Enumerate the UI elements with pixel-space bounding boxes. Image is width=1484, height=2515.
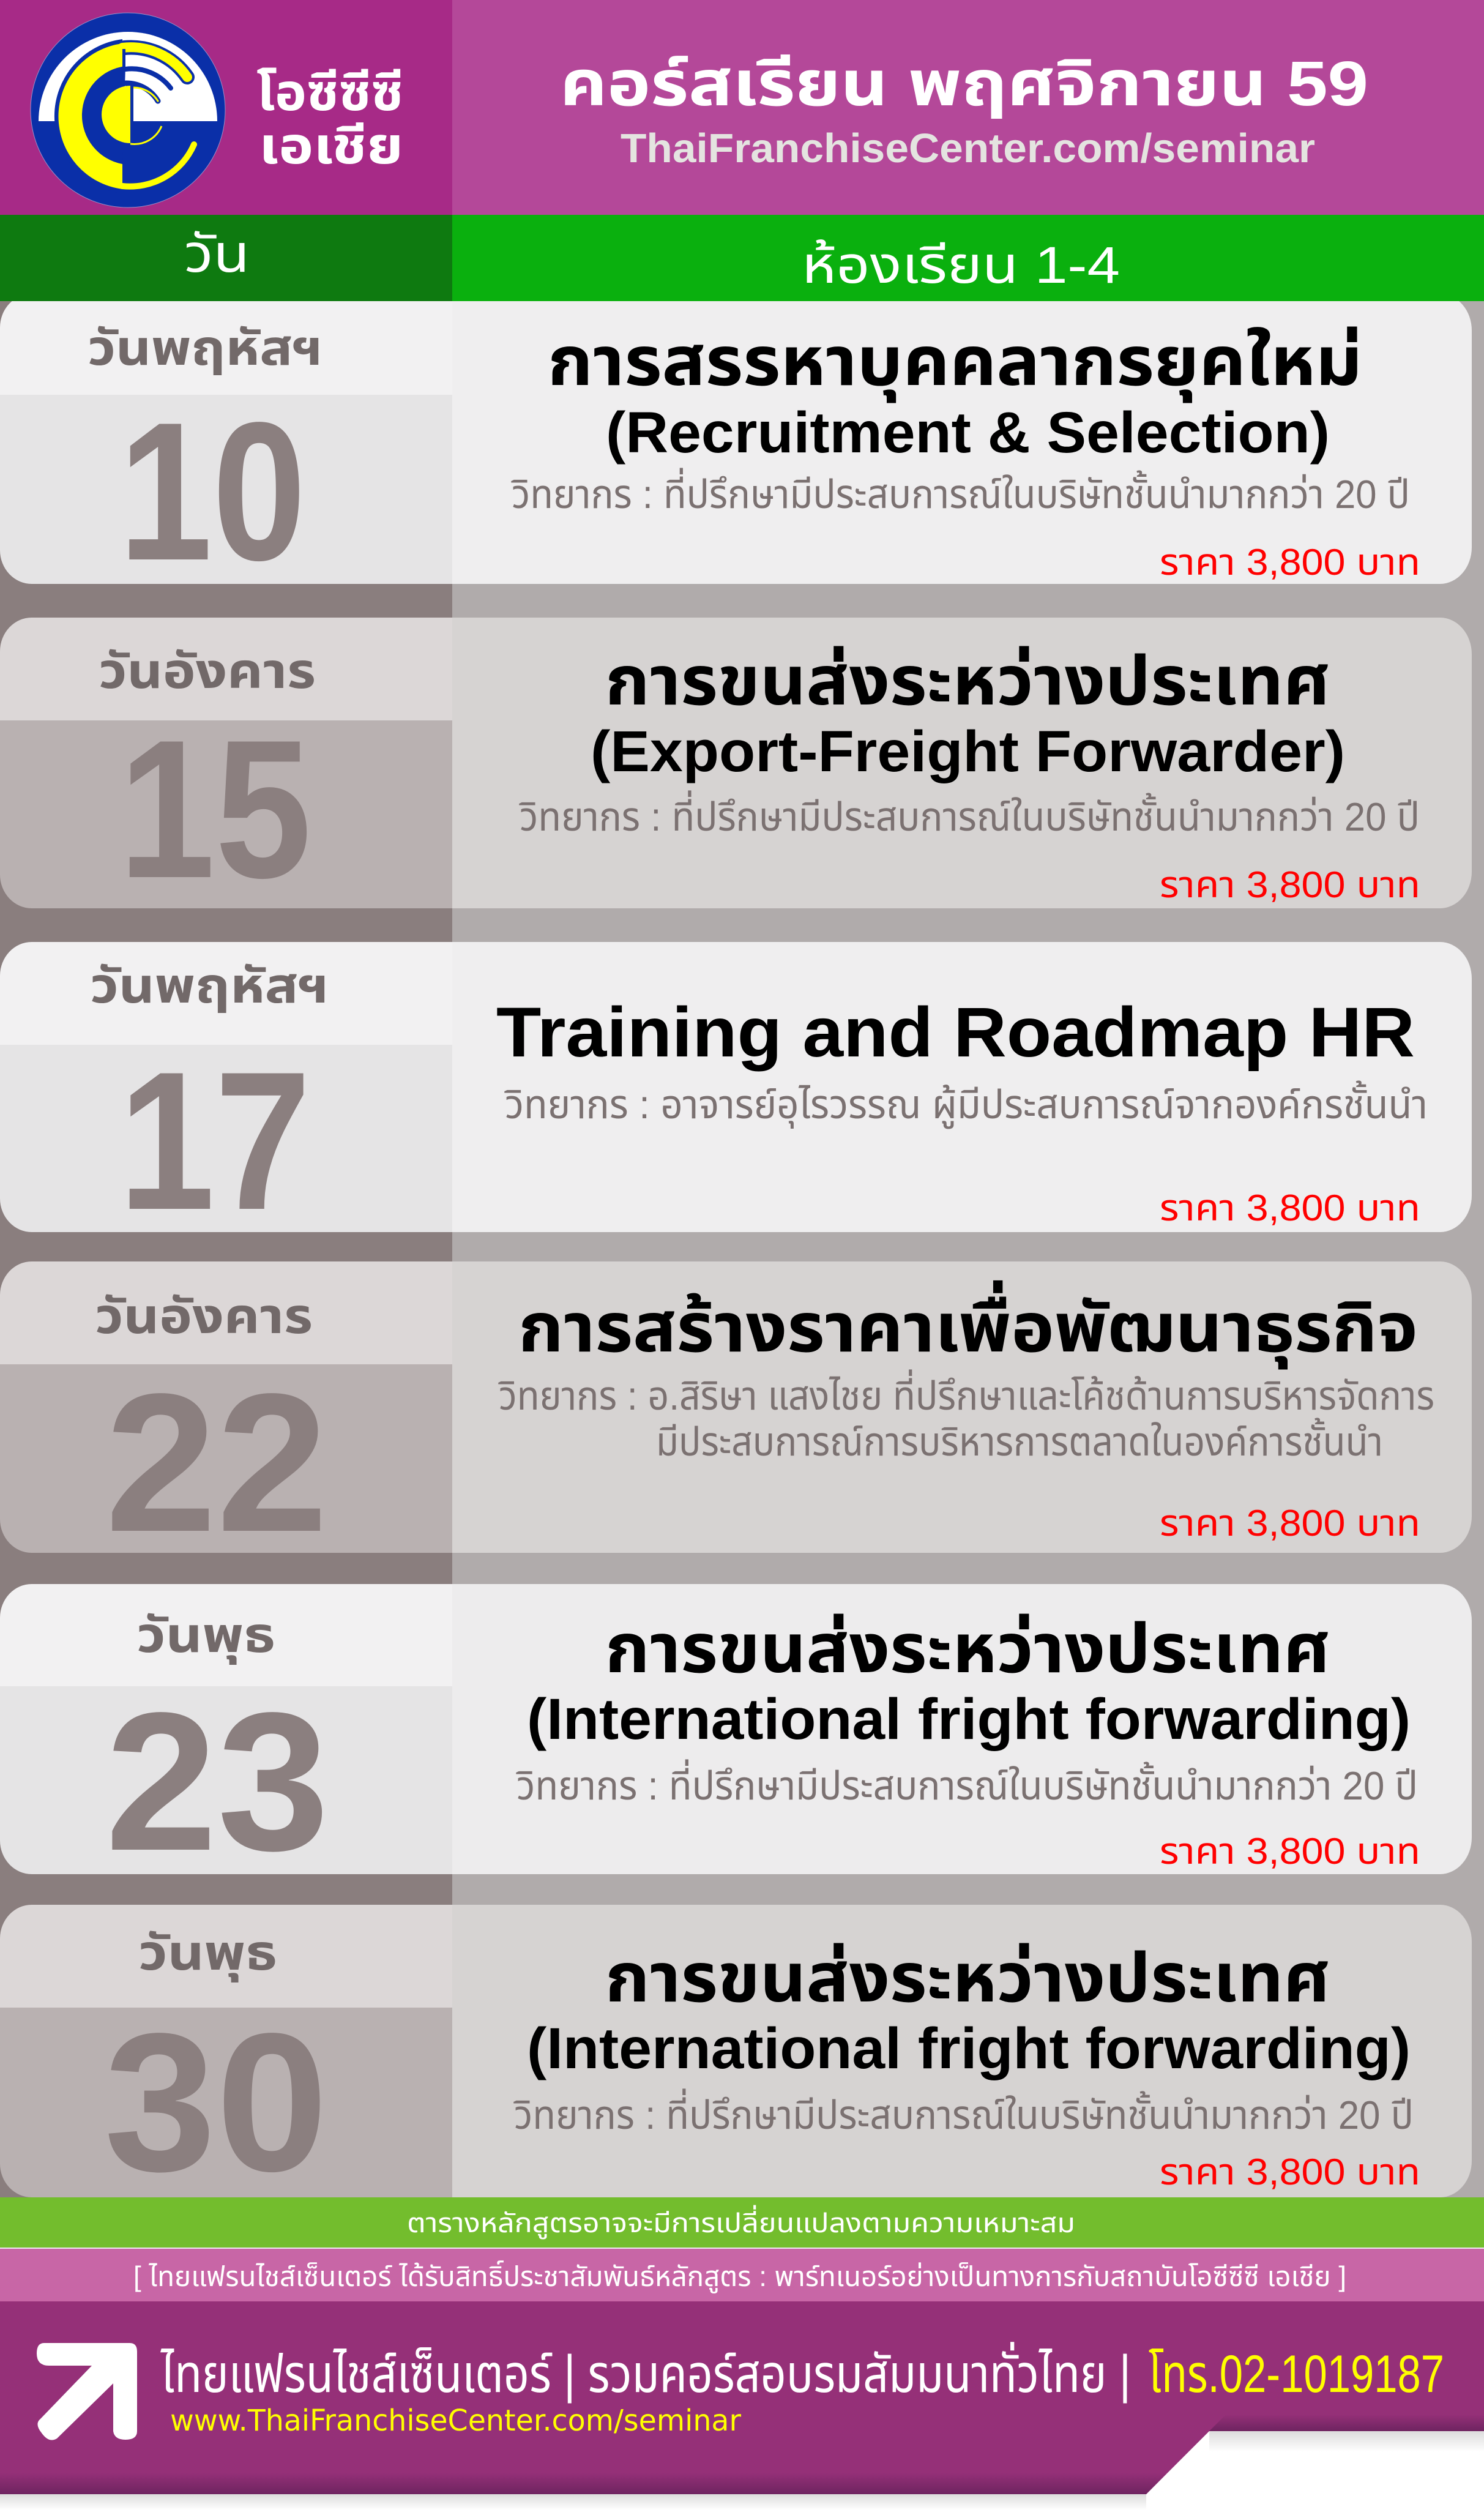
panel: course 23 xyxy=(0,1584,1472,1892)
date number: 15 xyxy=(119,700,311,919)
note bar: ตารางหลักสูตรอาจจะมีการเปลี่ยนแปลงตามความเหมาะสม xyxy=(407,2205,1075,2240)
course title: Training and Roadmap HR xyxy=(496,993,1415,1072)
course subtitle: (International fright forwarding) xyxy=(527,2016,1411,2081)
footer panel xyxy=(0,2301,1484,2510)
speaker xyxy=(498,1369,1434,1464)
course title: การสรรหาบุคคลากรยุคใหม่ xyxy=(548,323,1362,403)
course subtitle: (Export-Freight Forwarder) xyxy=(591,719,1345,784)
speaker: วิทยากร : ที่ปรึกษามีประสบการณ์ในบริษัทชั้นนำมากกว่า 20 ปี xyxy=(519,790,1420,839)
speaker: วิทยากร : อ.สิริษา แสงไชย ที่ปรึกษาและโค้ชด้านการบริหารจัดการ xyxy=(498,1369,1434,1418)
table header row xyxy=(0,215,1484,301)
date number: 23 xyxy=(105,1672,329,1892)
panel: course 22 xyxy=(0,1261,1472,1573)
footer website: www.ThaiFranchiseCenter.com/seminar xyxy=(170,2404,741,2438)
price: ราคา 3,800 บาท xyxy=(1160,1831,1420,1872)
partner bar xyxy=(0,2249,1484,2301)
date number: 17 xyxy=(119,1031,311,1251)
date number: 10 xyxy=(119,382,306,602)
day label: วันพฤหัสฯ xyxy=(90,959,329,1013)
speaker: วิทยากร : ที่ปรึกษามีประสบการณ์ในบริษัทชั้นนำมากกว่า 20 ปี xyxy=(513,2088,1414,2137)
footer slogan: ไทยแฟรนไชส์เซ็นเตอร์ | รวมคอร์สอบรมสัมมนาทั่วไทย | xyxy=(160,2342,1131,2404)
price: ราคา 3,800 บาท xyxy=(1160,2151,1420,2192)
brand name: โอซีซีซี xyxy=(256,64,403,121)
course title: การขนส่งระหว่างประเทศ xyxy=(605,1610,1330,1687)
date number: 30 xyxy=(104,1993,328,2213)
icon: arrow xyxy=(37,2343,137,2440)
header panel xyxy=(0,0,1484,215)
panel: course 15 xyxy=(0,618,1472,919)
date number: 22 xyxy=(105,1353,328,1573)
day label: วันพุธ xyxy=(138,1926,277,1982)
panel: course 10 xyxy=(0,294,1472,602)
icon: OCCC logo xyxy=(31,13,225,207)
brand name: เอเชีย xyxy=(259,117,403,174)
brand name xyxy=(256,64,403,174)
partner bar: [ ไทยแฟรนไชส์เซ็นเตอร์ ได้รับสิทธิ์ประชาสัมพันธ์หลักสูตร : พาร์ทเนอร์อย่างเป็นทางการกับสถาบันโอซีซีซี เอเชีย ] xyxy=(133,2260,1346,2293)
column label: classroom: ห้องเรียน 1-4 xyxy=(802,236,1120,294)
speaker: วิทยากร : อาจารย์อุไรวรรณ ผู้มีประสบการณ์จากองค์กรชั้นนำ xyxy=(504,1080,1428,1129)
price: ราคา 3,800 บาท xyxy=(1160,864,1420,905)
title: คอร์สเรียน พฤศจิกายน 59 xyxy=(560,48,1368,119)
speaker: วิทยากร : ที่ปรึกษามีประสบการณ์ในบริษัทชั้นนำมากกว่า 20 ปี xyxy=(511,468,1410,517)
day label: วันอังคาร xyxy=(95,1289,313,1343)
course title: การขนส่งระหว่างประเทศ xyxy=(605,643,1330,719)
panel: course 17 xyxy=(0,942,1472,1251)
price: ราคา 3,800 บาท xyxy=(1160,1503,1420,1544)
day label: วันอังคาร xyxy=(99,644,316,698)
price: ราคา 3,800 บาท xyxy=(1160,542,1420,583)
speaker: วิทยากร : ที่ปรึกษามีประสบการณ์ในบริษัทชั้นนำมากกว่า 20 ปี xyxy=(516,1759,1418,1808)
course title: การขนส่งระหว่างประเทศ xyxy=(605,1940,1330,2016)
course subtitle: (International fright forwarding) xyxy=(527,1687,1411,1752)
price: ราคา 3,800 บาท xyxy=(1160,1187,1420,1228)
course subtitle: (Recruitment & Selection) xyxy=(606,400,1330,465)
website: ThaiFranchiseCenter.com/seminar xyxy=(621,125,1315,171)
speaker: มีประสบการณ์การบริหารการตลาดในองค์การชั้นนำ xyxy=(656,1418,1383,1464)
panel: course 30 xyxy=(0,1905,1472,2213)
note bar xyxy=(0,2197,1484,2249)
day label: วันพฤหัสฯ xyxy=(88,321,323,375)
day label: วันพุธ xyxy=(136,1608,275,1665)
column label: day: วัน xyxy=(184,225,250,283)
course title: การสร้างราคาเพื่อพัฒนาธุรกิจ xyxy=(518,1280,1418,1369)
